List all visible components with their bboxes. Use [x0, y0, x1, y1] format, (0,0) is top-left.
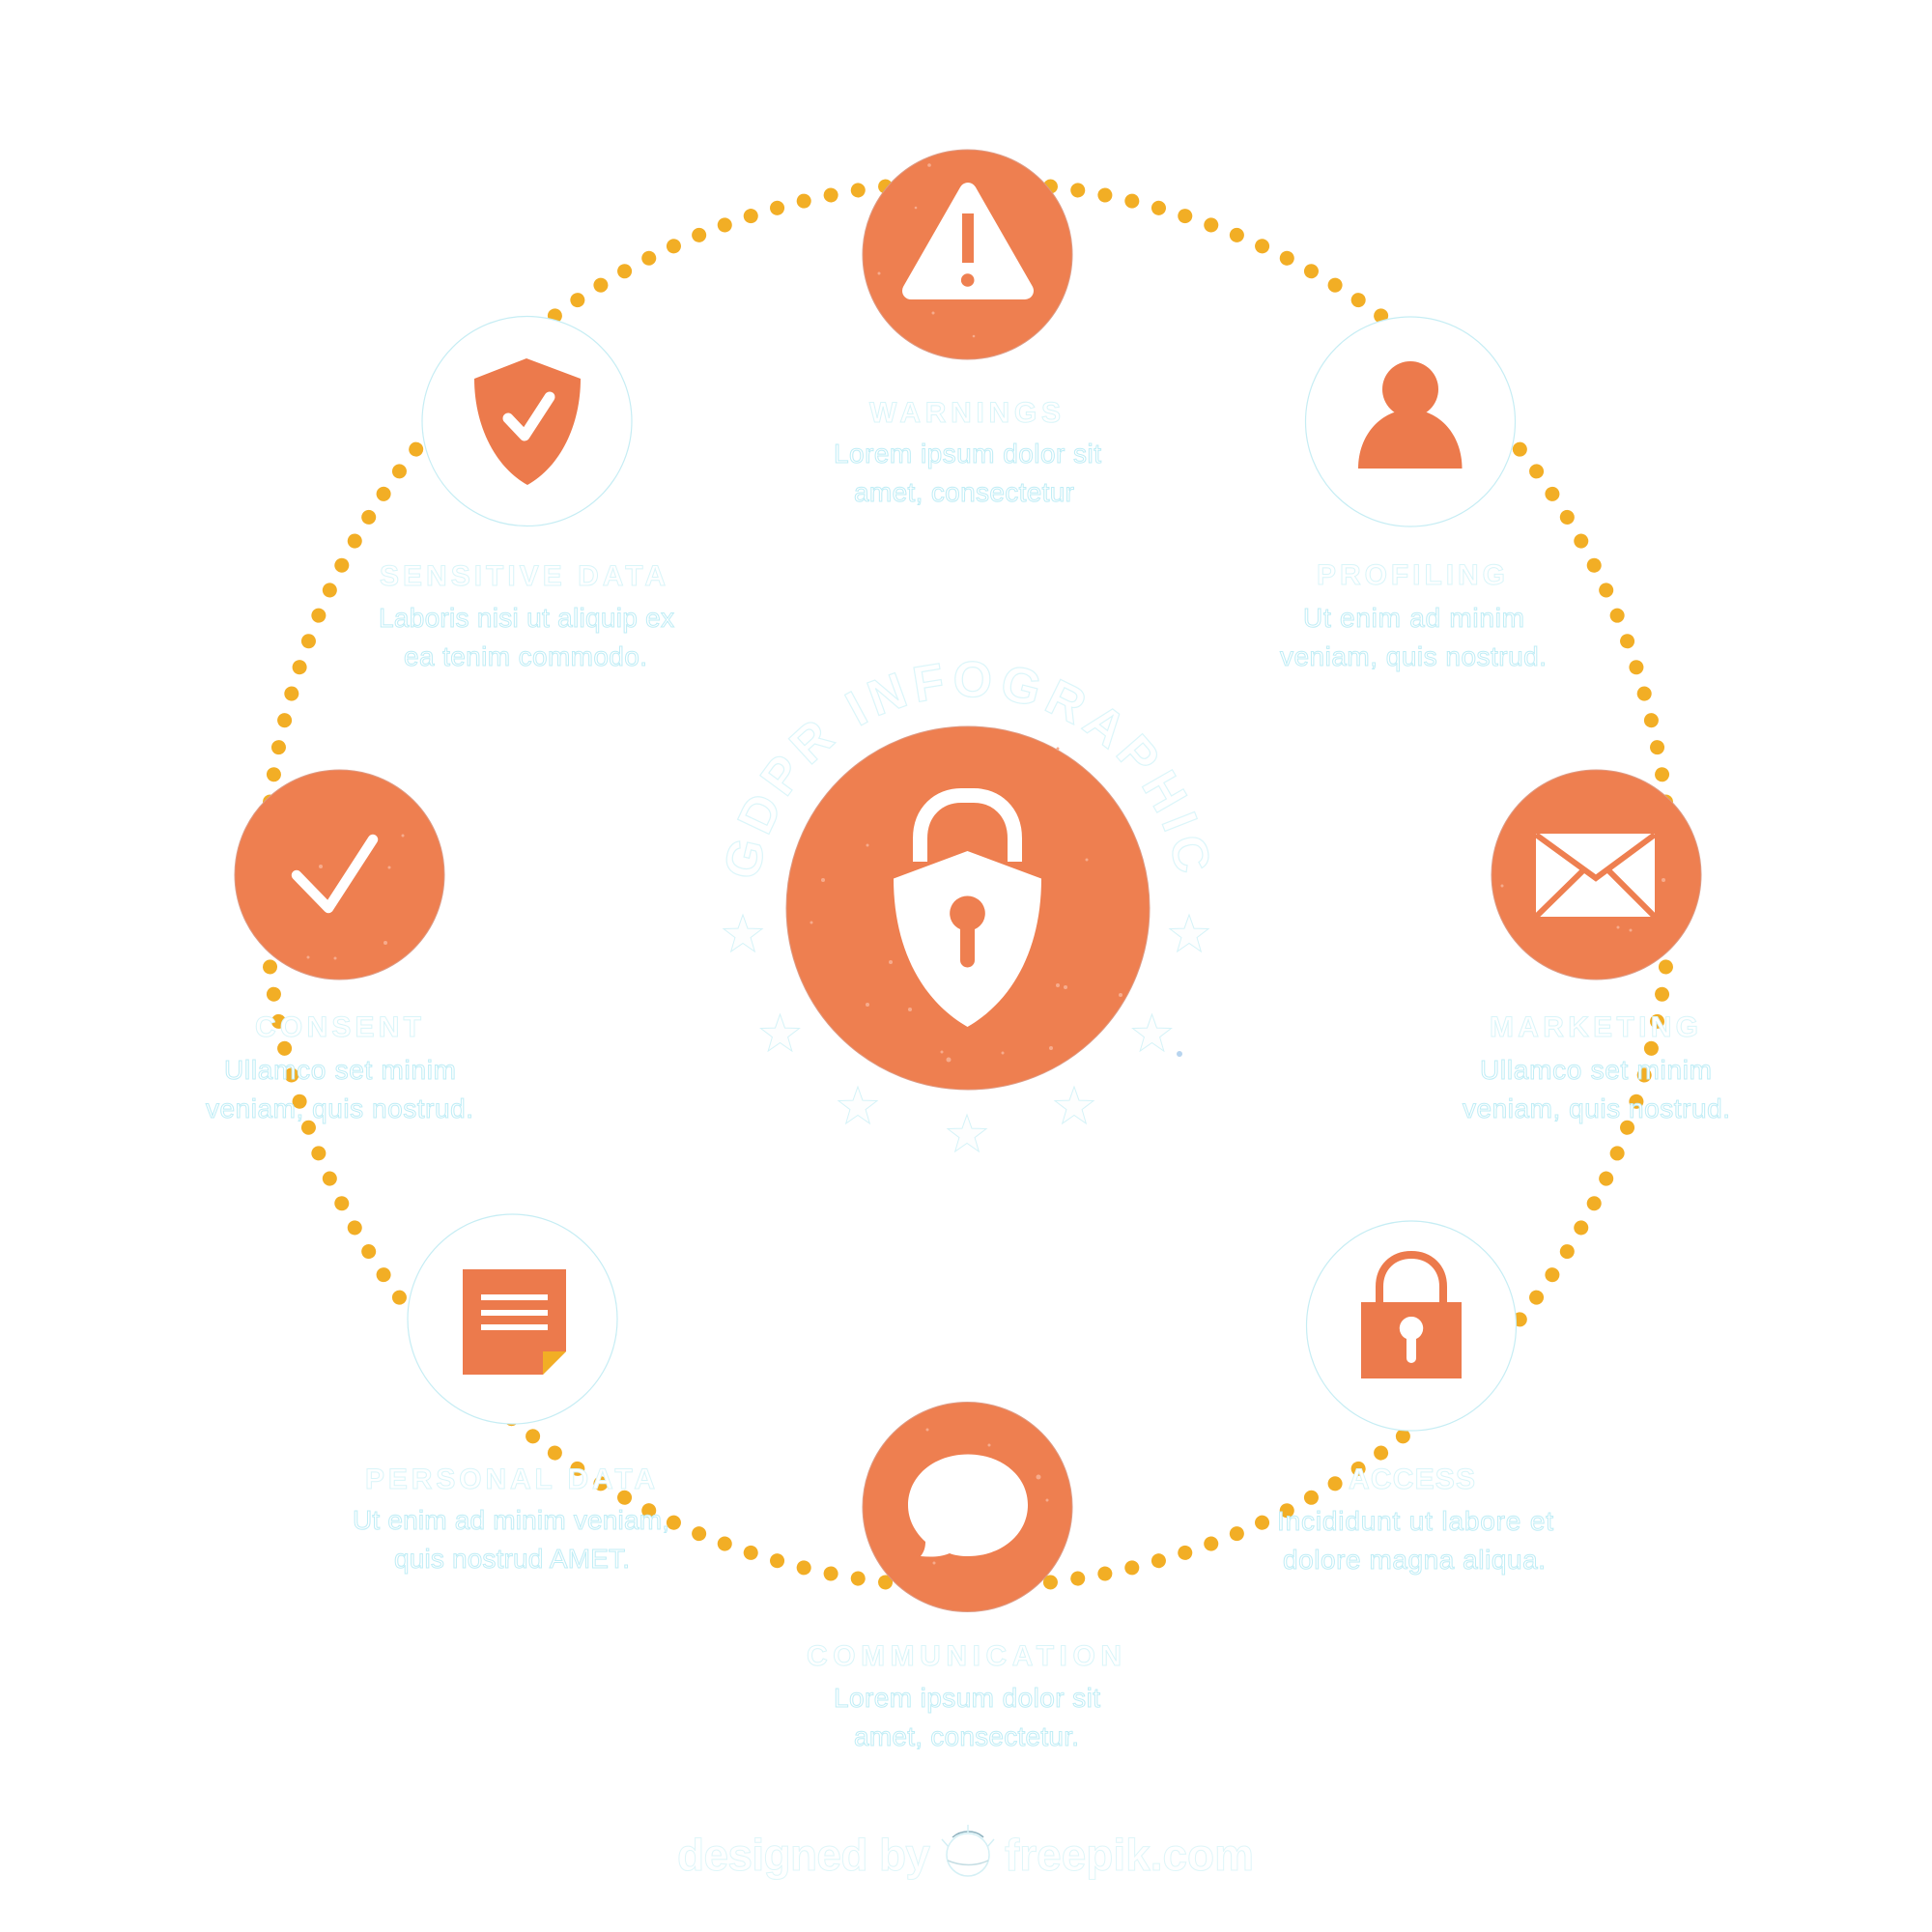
icon: note [463, 1269, 566, 1375]
heading: PERSONAL DATA [365, 1463, 655, 1495]
text block: Incididunt ut labore et [1277, 1506, 1553, 1536]
heading: PROFILING [1317, 559, 1505, 591]
stars [724, 915, 1208, 1151]
text block: ea tenim commodo. [404, 641, 647, 671]
text block: Ut enim ad minim [1303, 603, 1524, 633]
text block [834, 439, 1101, 507]
text block: dolore magna aliqua. [1283, 1545, 1546, 1575]
icon: padlock [1361, 1255, 1462, 1378]
icon: check mark [297, 839, 373, 908]
panel: personal data [353, 1214, 669, 1574]
heading: SENSITIVE DATA [380, 560, 666, 592]
text block: Lorem ipsum dolor sit [834, 1683, 1100, 1713]
icon: shield with check [474, 358, 581, 485]
heading: ACCESS [1349, 1463, 1475, 1495]
text block [379, 603, 674, 671]
heading: CONSENT [255, 1011, 421, 1043]
panel: communication [807, 1403, 1122, 1751]
icon: speech bubble [908, 1455, 1028, 1557]
text block: quis nostrud AMET. [394, 1544, 630, 1574]
panel: access [1277, 1221, 1553, 1575]
icon: shackle [920, 796, 1014, 862]
heading: COMMUNICATION [807, 1640, 1122, 1672]
panel: warnings [834, 150, 1101, 507]
heading: WARNINGS [869, 397, 1061, 429]
text block [206, 1055, 473, 1123]
center title: GDPR INFOGRAPHIC: GDPR INFOGRAPHIC [726, 661, 1209, 877]
text block: amet, consectetur. [854, 1721, 1079, 1751]
text block [1280, 603, 1547, 671]
icon: envelope [1536, 834, 1655, 917]
text block: veniam, quis nostrud. [1463, 1094, 1730, 1123]
dotted ring [265, 182, 1671, 1587]
panel: profiling [1280, 317, 1547, 671]
text block: amet, consectetur [854, 477, 1074, 507]
text block: Ut enim ad minim veniam, [353, 1505, 669, 1535]
text block [1277, 1506, 1553, 1575]
text block: Lorem ipsum dolor sit [834, 439, 1101, 469]
footer credit: designed by [677, 1830, 930, 1880]
center badge: lock shield [786, 726, 1150, 1090]
text block: veniam, quis nostrud. [206, 1094, 473, 1123]
text block [1463, 1055, 1730, 1123]
panel: marketing [1463, 770, 1730, 1123]
text block [353, 1505, 669, 1574]
text block: veniam, quis nostrud. [1280, 641, 1547, 671]
text block [834, 1683, 1100, 1751]
footer credit: freepik.com [1005, 1830, 1254, 1880]
text block: Ullamco set minim [1480, 1055, 1712, 1085]
text block: Ullamco set minim [224, 1055, 456, 1085]
icon: person [1358, 361, 1463, 469]
icon: warning triangle [911, 191, 1025, 291]
footer credit [677, 1825, 1254, 1880]
icon: freepik logo [942, 1825, 994, 1876]
panel: consent [206, 770, 473, 1123]
panel: sensitive data [379, 317, 674, 671]
heading: MARKETING [1490, 1011, 1698, 1043]
icon: shield [894, 851, 1041, 1027]
text block: Laboris nisi ut aliquip ex [379, 603, 674, 633]
icon: exclamation mark [961, 213, 974, 287]
icon: keyhole [950, 895, 985, 968]
